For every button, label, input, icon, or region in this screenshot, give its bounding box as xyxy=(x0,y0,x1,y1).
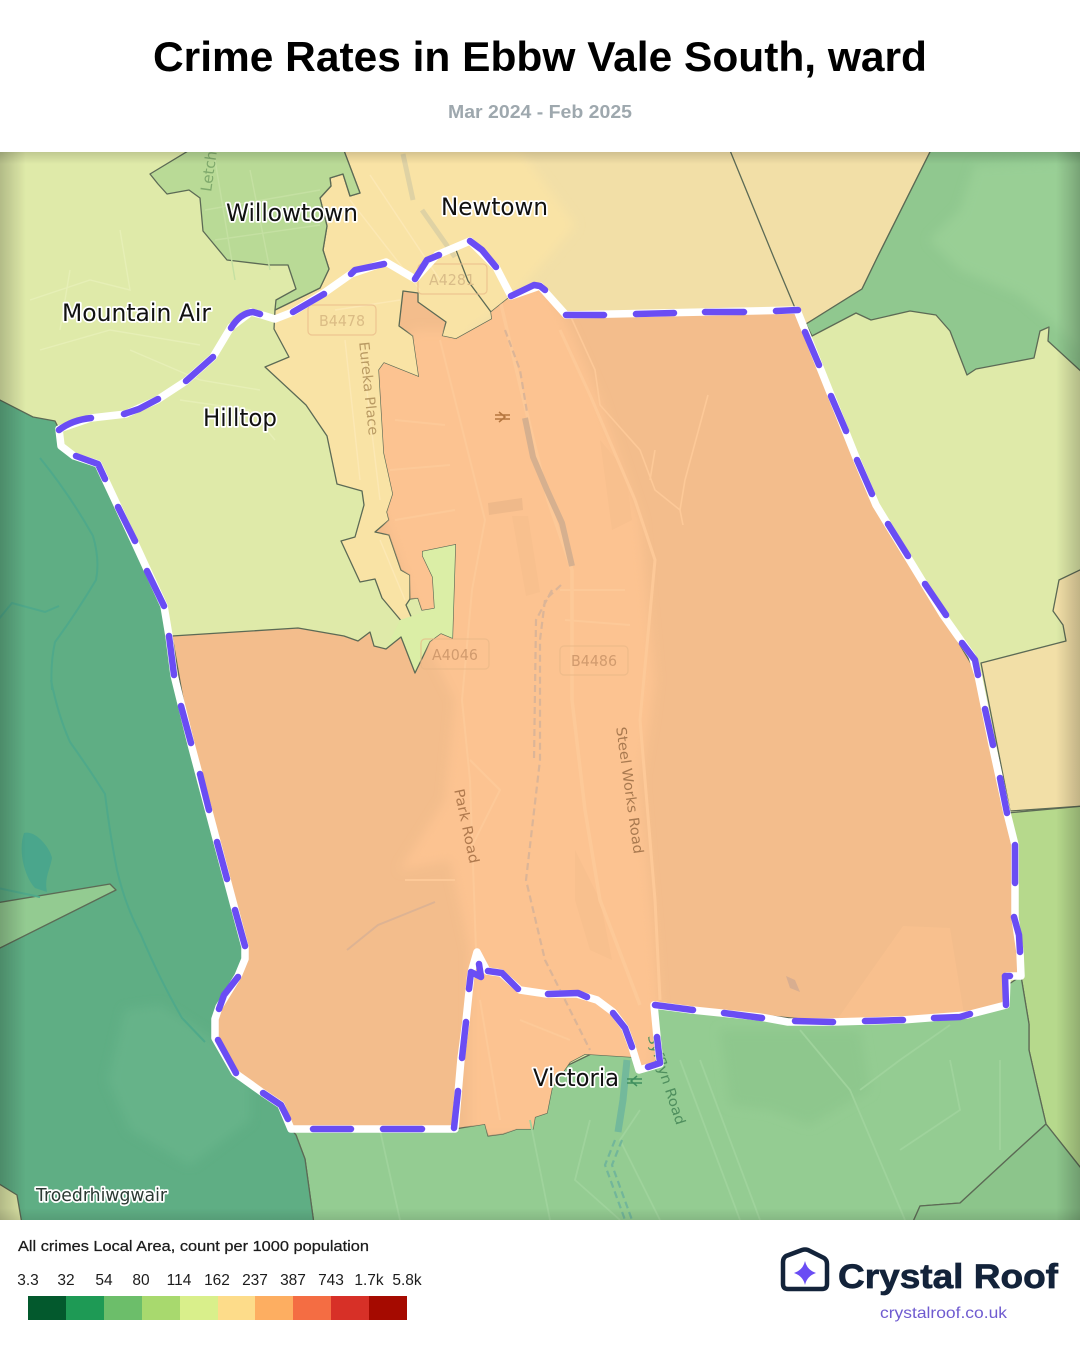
region: tan outline xyxy=(265,148,932,623)
road shield: A4046 xyxy=(421,639,489,669)
gray railway bed xyxy=(525,418,572,566)
region: Ebbw Vale South ward orange xyxy=(172,286,1021,1136)
logo wordmark: Crystal Roof xyxy=(838,1258,1059,1296)
urban corridor lighter area xyxy=(370,285,660,1135)
place label: Victoria: Victoria xyxy=(533,1064,619,1092)
place label: Willowtown: Willowtown xyxy=(226,199,358,227)
Newtown streets xyxy=(335,175,440,600)
legend values: 3.3 xyxy=(17,1272,39,1289)
region: green wedge xyxy=(0,884,116,950)
legend values: 80 xyxy=(132,1272,150,1289)
road shield: A4281: A4281 xyxy=(429,271,475,289)
logo: Crystal Roof xyxy=(783,1250,1059,1322)
lighter hillside patch xyxy=(836,926,964,1021)
road shield: A4046: A4046 xyxy=(432,646,478,664)
region: tan far east xyxy=(981,568,1080,811)
region: dark green west xyxy=(0,398,314,1224)
region: green pocket beside A4046 xyxy=(400,616,414,624)
region: paler green south-west hillside xyxy=(108,1005,250,1165)
region: lighter Newtown streets xyxy=(250,150,575,620)
road label: Letch: Letch xyxy=(197,150,221,193)
legend values: 5.8k xyxy=(392,1272,422,1289)
road label: Park Road: Park Road xyxy=(450,787,482,865)
region lines xyxy=(456,148,795,312)
legend values: 114 xyxy=(167,1272,192,1289)
title: Crime Rates in Ebbw Vale South, ward xyxy=(153,33,927,80)
legend values: 387 xyxy=(280,1272,306,1289)
streams xyxy=(0,458,205,1042)
road label: Steel Works Road: Steel Works Road xyxy=(612,726,646,855)
road shield: B4478 xyxy=(308,305,376,335)
lake xyxy=(22,833,52,892)
railway dashed line south xyxy=(605,1140,632,1220)
legend values: 237 xyxy=(242,1272,268,1289)
ward boundary white line xyxy=(59,241,1021,1129)
Willowtown streets xyxy=(205,160,320,280)
road shield: B4486 xyxy=(560,646,628,675)
place label: Troedrhiwgwair: Troedrhiwgwair xyxy=(35,1185,168,1206)
pale gray valley stream xyxy=(403,154,455,257)
icon: house with star xyxy=(783,1250,827,1289)
region: light green east edge xyxy=(1007,806,1080,1172)
legend title: All crimes Local Area, count per 1000 population xyxy=(18,1239,369,1255)
icon: station north xyxy=(495,412,510,422)
region: Mountain Air and Hilltop base xyxy=(0,152,1080,1064)
region: pale corner xyxy=(0,1184,22,1220)
subtitle: date range: Mar 2024 - Feb 2025 xyxy=(448,102,632,122)
legend xyxy=(17,1239,422,1320)
map edge vignette xyxy=(0,152,1080,1220)
town streets xyxy=(405,302,708,1000)
south green roads xyxy=(380,1025,1000,1220)
region: green south xyxy=(291,976,1046,1224)
railway dashed line xyxy=(505,330,590,1050)
legend values: 743 xyxy=(318,1272,344,1289)
road label: Eureka Place: Eureka Place xyxy=(355,341,381,436)
ward boundary purple dashes xyxy=(59,241,1020,1129)
legend values: 32 xyxy=(57,1272,75,1289)
place label: Hilltop: Hilltop xyxy=(203,404,277,432)
region: Willowtown green xyxy=(150,148,360,310)
Willowtown and Mountain Air streets xyxy=(30,230,275,440)
region: green north-east hills xyxy=(806,148,1080,375)
website url: crystalroof.co.uk xyxy=(880,1305,1008,1322)
choropleth map xyxy=(0,148,1080,1224)
darker patches in corridor xyxy=(512,440,632,960)
road shield: A4281 xyxy=(418,264,487,294)
region: south-east green xyxy=(912,1124,1080,1224)
road label: Syfflyn Road: Syfflyn Road xyxy=(644,1033,688,1127)
region: green south mid patch xyxy=(720,1030,870,1125)
road shield: B4478: B4478 xyxy=(319,312,365,330)
region: tan north and east xyxy=(401,152,929,620)
legend values: 1.7k xyxy=(354,1272,384,1289)
legend values: 162 xyxy=(204,1272,230,1289)
place label: Mountain Air: Mountain Air xyxy=(62,299,211,327)
gray track in hillside xyxy=(347,902,435,950)
legend colour scale xyxy=(28,1296,407,1320)
legend values xyxy=(17,1272,422,1289)
icon: station Victoria xyxy=(627,1076,642,1086)
pond xyxy=(786,976,800,992)
rectangular building xyxy=(488,498,523,515)
road shield: B4486: B4486 xyxy=(571,652,617,670)
legend values: 54 xyxy=(95,1272,113,1289)
region: lighter green hilltop patch xyxy=(942,168,1068,328)
place label: Newtown: Newtown xyxy=(441,193,548,221)
river channel in Victoria xyxy=(618,1060,627,1132)
